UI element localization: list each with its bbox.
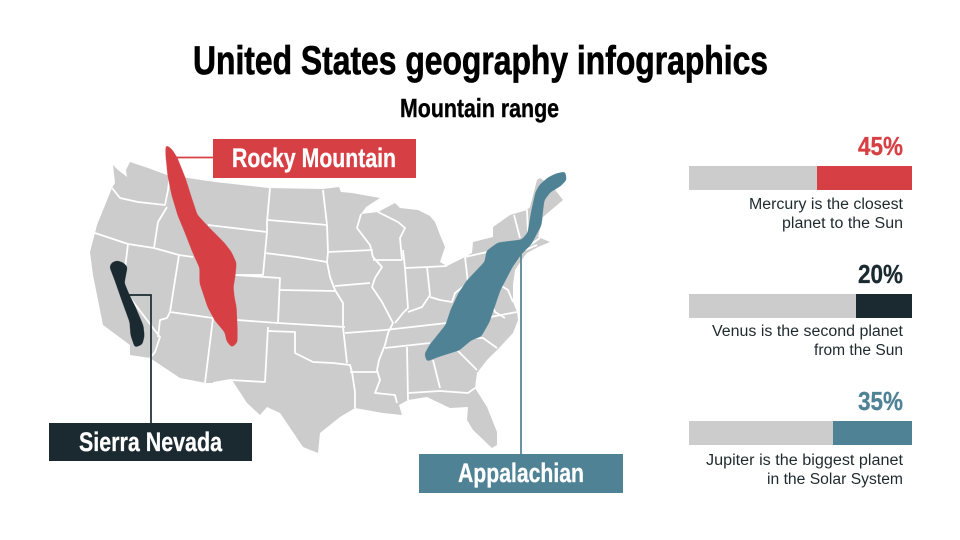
progress bar [689, 166, 912, 190]
label: Sierra Nevada [49, 423, 252, 461]
map: land silhouette [90, 162, 563, 453]
stat: Mercury 45% [689, 131, 912, 232]
description: in the Solar System [767, 471, 903, 488]
stat: Jupiter 35% [689, 386, 912, 488]
description [712, 323, 904, 359]
label: Rocky Mountain: Rocky Mountain [232, 143, 396, 173]
label: Sierra Nevada: Sierra Nevada [79, 427, 223, 457]
description [749, 196, 904, 232]
percentage: 45% [858, 131, 903, 161]
title: United States geography infographics [193, 39, 768, 83]
description: Venus is the second planet [712, 323, 904, 340]
label: Appalachian: Appalachian [458, 458, 584, 488]
mountain: Sierra Nevada range [110, 261, 144, 347]
label: Rocky Mountain [213, 139, 416, 178]
percentage: 20% [858, 259, 903, 289]
map of the United States [90, 162, 563, 453]
description: Mercury is the closest [749, 196, 904, 213]
connector: Rocky Mountain [176, 156, 214, 158]
label: Appalachian [419, 454, 623, 493]
stat: Venus 20% [689, 259, 912, 359]
connector: Sierra Nevada [128, 295, 151, 423]
description: Jupiter is the biggest planet [706, 452, 904, 469]
mountain: Rocky Mountain range [166, 145, 237, 347]
percentage: 35% [858, 386, 903, 416]
description [706, 452, 904, 488]
subtitle: Mountain range [400, 93, 559, 123]
progress bar [689, 294, 912, 318]
map: state borders [95, 175, 540, 408]
description: planet to the Sun [782, 215, 903, 232]
description: from the Sun [814, 342, 903, 359]
progress bar [689, 421, 912, 445]
connector: Appalachian [520, 252, 522, 454]
mountain: Appalachian range [425, 172, 566, 361]
